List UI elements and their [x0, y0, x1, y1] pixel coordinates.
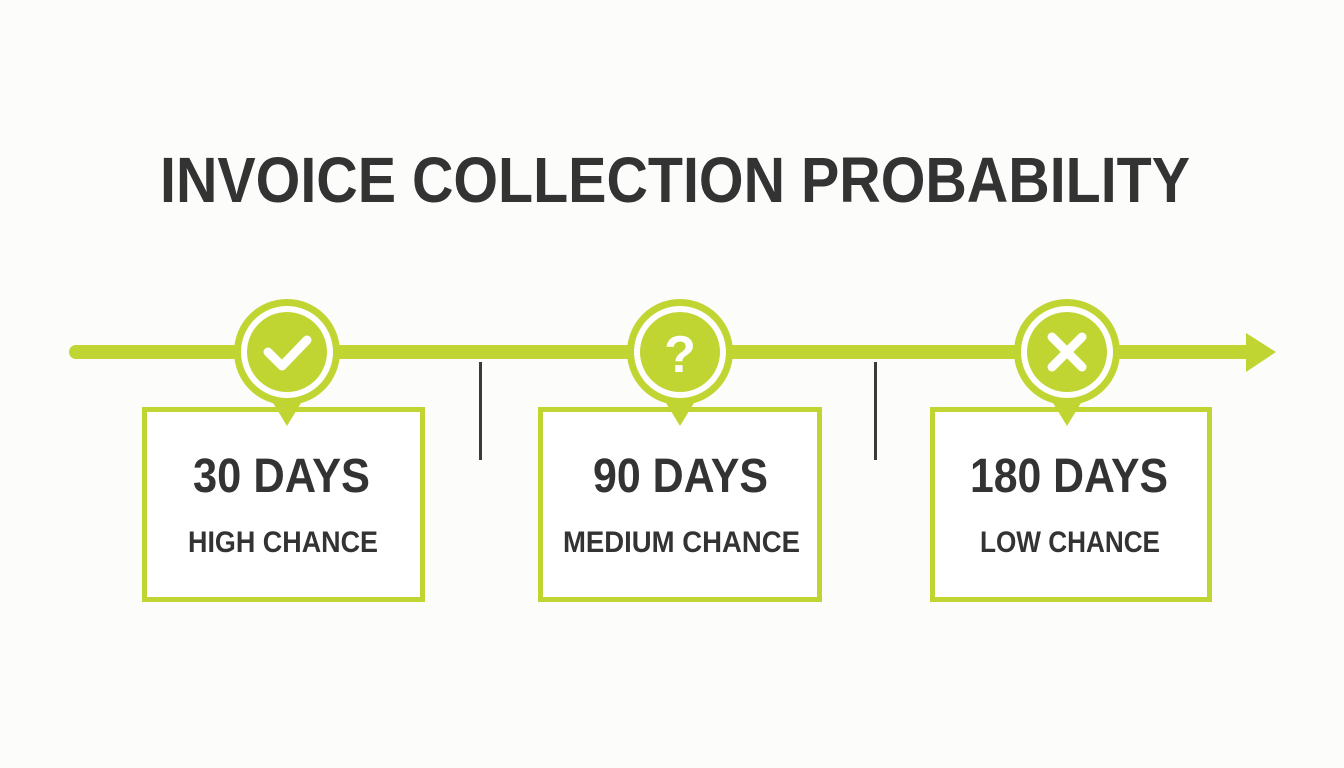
panel: 90 days — [540, 410, 820, 600]
panel: 180 days — [932, 410, 1210, 600]
title: INVOICE COLLECTION PROBABILITY — [160, 144, 1190, 216]
panel: 90 days: 90 DAYS — [593, 450, 768, 503]
icon: cross marker — [1014, 299, 1120, 426]
panel: 30 days — [144, 410, 422, 600]
divider 2 — [874, 362, 877, 460]
icon: check marker — [234, 299, 340, 426]
panel: 30 days: HIGH CHANCE — [188, 526, 378, 559]
panel: 90 days: MEDIUM CHANCE — [563, 526, 800, 559]
panel: 180 days: LOW CHANCE — [980, 526, 1160, 559]
icon: question marker — [627, 299, 733, 426]
panel: 30 days: 30 DAYS — [193, 450, 370, 503]
panel: 180 days: 180 DAYS — [970, 450, 1168, 503]
divider 1 — [479, 362, 482, 460]
icon: question marker: ? — [664, 326, 696, 384]
timeline arrow — [76, 333, 1276, 372]
